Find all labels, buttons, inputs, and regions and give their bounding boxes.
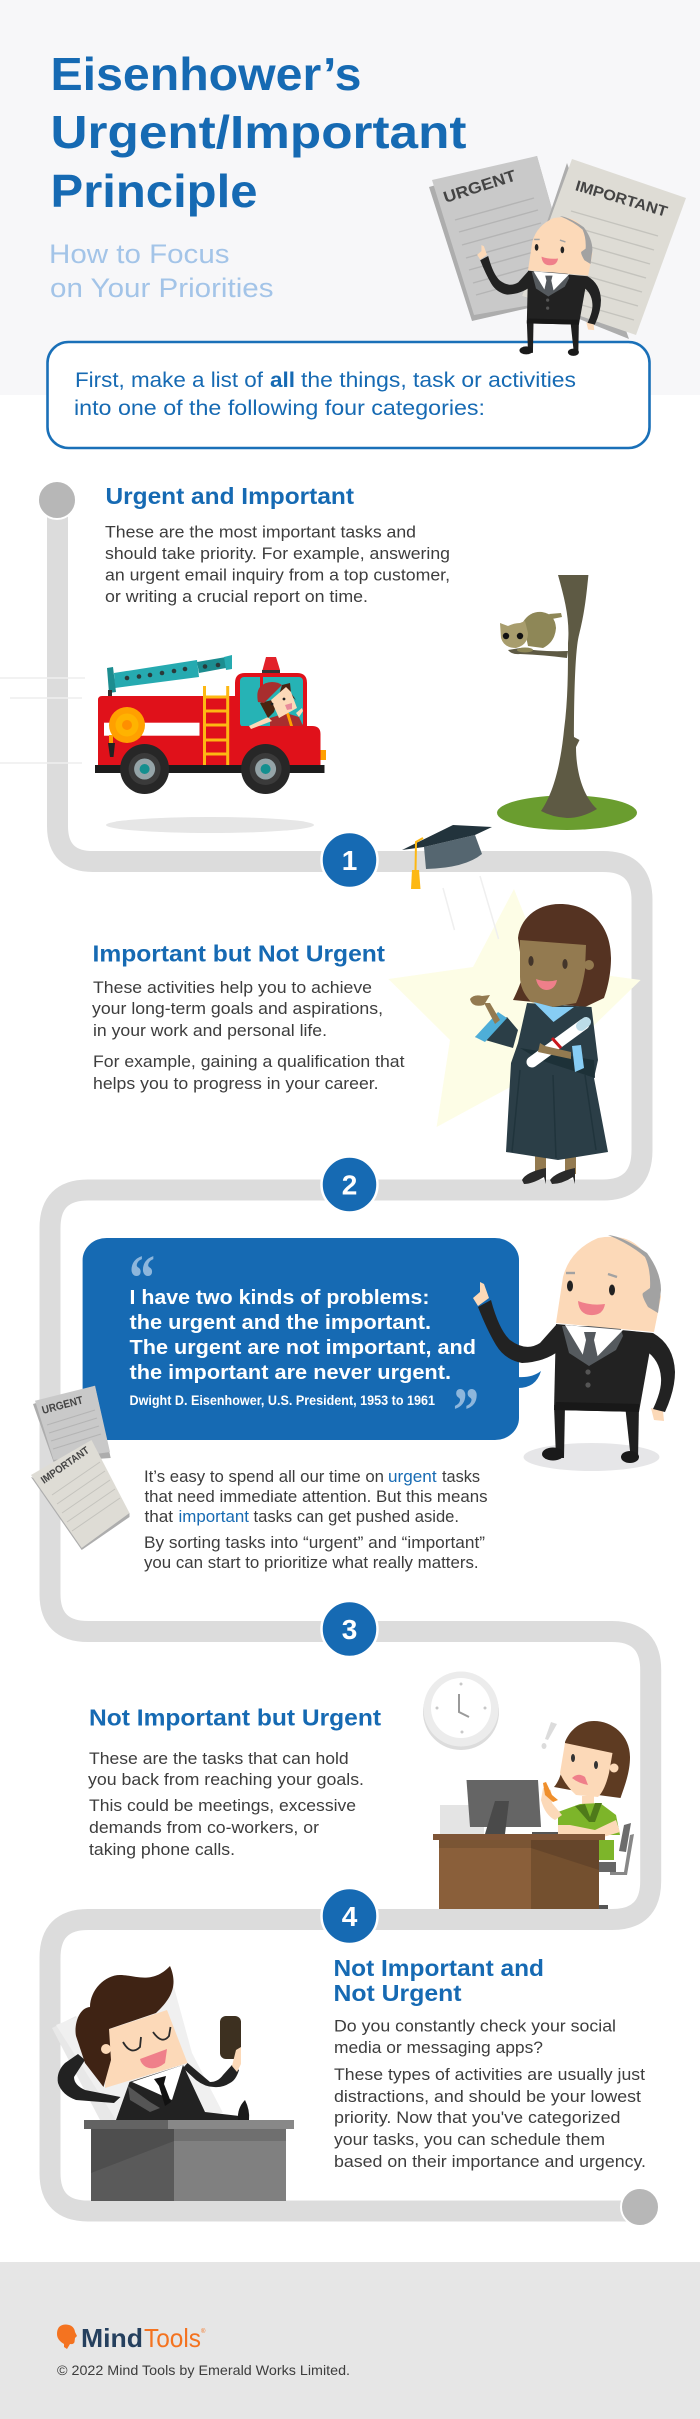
speed lines: [0, 678, 85, 763]
section 3 body text: that need immediate attention. But this means: [144, 1487, 488, 1506]
badge 4: [322, 1888, 378, 1944]
section 1 body text: [105, 523, 450, 606]
icon: important paper: IMPORTANT: [573, 178, 669, 221]
section 2 body text: These activities help you to achieve: [93, 978, 372, 997]
section 4 body text: [334, 2017, 646, 2171]
subtitle: How to Focus: [49, 239, 230, 269]
badge 1: 1: [342, 845, 357, 876]
subtitle: on Your Priorities: [50, 273, 274, 303]
large Eisenhower figure: [473, 1235, 675, 1463]
copyright: © 2022 Mind Tools by Emerald Works Limited.: [57, 2362, 350, 2378]
section 4 body text: Do you constantly check your social: [334, 2017, 616, 2036]
header background: [0, 0, 700, 395]
section 2 body text: helps you to progress in your career.: [93, 1074, 379, 1093]
footer background: [0, 2262, 700, 2419]
icon: clock: [423, 1672, 499, 1750]
section 4 body text: your tasks, you can schedule them: [334, 2130, 605, 2149]
Mind Tools logo: Tools: [144, 2323, 201, 2353]
truck shadow: [106, 817, 314, 833]
star behind graduate: [388, 889, 641, 1127]
section 3 body text: tasks can get pushed aside.: [254, 1507, 459, 1526]
section 3b body text: These are the tasks that can hold: [89, 1749, 349, 1768]
icon: small important paper: IMPORTANT: [39, 1444, 92, 1486]
icon: small urgent paper: URGENT: [41, 1394, 85, 1417]
opening quote mark: “: [129, 1242, 155, 1315]
title: Principle: [50, 165, 258, 217]
attribution: Dwight D. Eisenhower, U.S. President, 1953 to 1961: [130, 1393, 435, 1408]
intro callout box: the things, task or activities: [301, 368, 576, 392]
quote speech bubble: [83, 1238, 541, 1448]
section 4 heading: Not Urgent: [334, 1980, 462, 2006]
section 3 body text: It’s easy to spend all our time on: [144, 1467, 384, 1486]
section 1 body text: or writing a crucial report on time.: [105, 587, 368, 606]
badge 1: [322, 832, 378, 888]
section 2 body text: [92, 978, 405, 1093]
section 3 heading: Not Important but Urgent: [89, 1705, 381, 1731]
graduate figure: [470, 904, 611, 1184]
closing quote mark: ”: [453, 1375, 479, 1448]
section 1 heading: Urgent and Important: [106, 483, 354, 509]
section 2 body text: For example, gaining a qualification that: [93, 1052, 405, 1071]
motion lines below cap: [443, 876, 499, 939]
section 3b body text: demands from co-workers, or: [89, 1818, 319, 1837]
section 4 body text: These types of activities are usually just: [334, 2065, 645, 2084]
title: Urgent/Important: [50, 106, 466, 158]
icon: urgent paper: [429, 156, 577, 321]
badge 4: 4: [342, 1901, 358, 1932]
section 2 heading: Important but Not Urgent: [92, 941, 385, 967]
intro callout box: into one of the following four categories:: [74, 396, 485, 420]
intro callout box: all: [270, 368, 295, 392]
winding path: [50, 500, 651, 2211]
quote text: the important are never urgent.: [130, 1361, 451, 1384]
intro callout box: First, make a list of: [75, 368, 263, 392]
icon: fire truck: [95, 655, 326, 794]
section 4 body text: priority. Now that you've categorized: [334, 2108, 620, 2127]
section 3 body text: tasks: [442, 1467, 480, 1486]
section 3 body text: you can start to prioritize what really matters.: [144, 1553, 479, 1572]
section 3b body text: taking phone calls.: [89, 1840, 235, 1859]
section 4 heading: [334, 1955, 544, 2006]
section 3b body text: This could be meetings, excessive: [89, 1796, 356, 1815]
quote text: The urgent are not important, and: [130, 1336, 476, 1359]
title: Eisenhower’s: [50, 48, 362, 100]
icon: small important paper: [31, 1440, 130, 1550]
section 1 body text: an urgent email inquiry from a top customer,: [105, 566, 450, 585]
path start dot: [38, 481, 76, 519]
section 4 body text: based on their importance and urgency.: [334, 2152, 646, 2171]
section 4 body text: media or messaging apps?: [334, 2038, 543, 2057]
icon: tree and cat: [497, 575, 637, 830]
section 2 body text: in your work and personal life.: [93, 1021, 327, 1040]
subtitle: [49, 239, 274, 303]
path end dot: [621, 2188, 659, 2226]
badge 2: 2: [342, 1170, 357, 1200]
large Eisenhower shadow: [524, 1443, 660, 1471]
section 1 body text: should take priority. For example, answering: [105, 544, 450, 563]
badge 3: [322, 1601, 378, 1657]
section 4 body text: distractions, and should be your lowest: [334, 2087, 641, 2106]
quote text: the urgent and the important.: [130, 1311, 431, 1334]
intro callout box: [48, 342, 650, 448]
quote text: I have two kinds of problems:: [130, 1286, 430, 1309]
section 3b body text: you back from reaching your goals.: [88, 1770, 364, 1789]
section 3 body text: urgent: [388, 1467, 437, 1486]
section 3 body text: By sorting tasks into “urgent” and “important”: [144, 1533, 485, 1552]
quote text: [130, 1286, 476, 1384]
Mind Tools logo: Mind: [81, 2323, 143, 2353]
section 2 body text: your long-term goals and aspirations,: [92, 999, 383, 1018]
section 4 heading: Not Important and: [334, 1955, 544, 1981]
icon: office worker at desk: [433, 1721, 634, 1909]
section 3b body text: [88, 1749, 364, 1859]
Mind Tools logo: ®: [201, 2328, 206, 2335]
icon: graduation cap: [402, 825, 492, 889]
badge 2: [322, 1156, 378, 1212]
section 3 body text: that: [144, 1507, 173, 1526]
icon: small urgent paper: [33, 1386, 111, 1462]
logo head icon: [57, 2324, 77, 2349]
icon: important paper: [522, 159, 686, 339]
icon: relaxed man at desk with phone: [52, 1966, 294, 2201]
section 3 body text: important: [178, 1507, 249, 1526]
Mind Tools logo: [57, 2323, 206, 2353]
icon: urgent paper: URGENT: [442, 168, 518, 207]
small Eisenhower figure: [477, 216, 601, 356]
badge 3: 3: [342, 1614, 357, 1645]
title: [50, 48, 466, 217]
section 3 body text: [144, 1467, 488, 1572]
section 1 body text: These are the most important tasks and: [105, 523, 416, 542]
